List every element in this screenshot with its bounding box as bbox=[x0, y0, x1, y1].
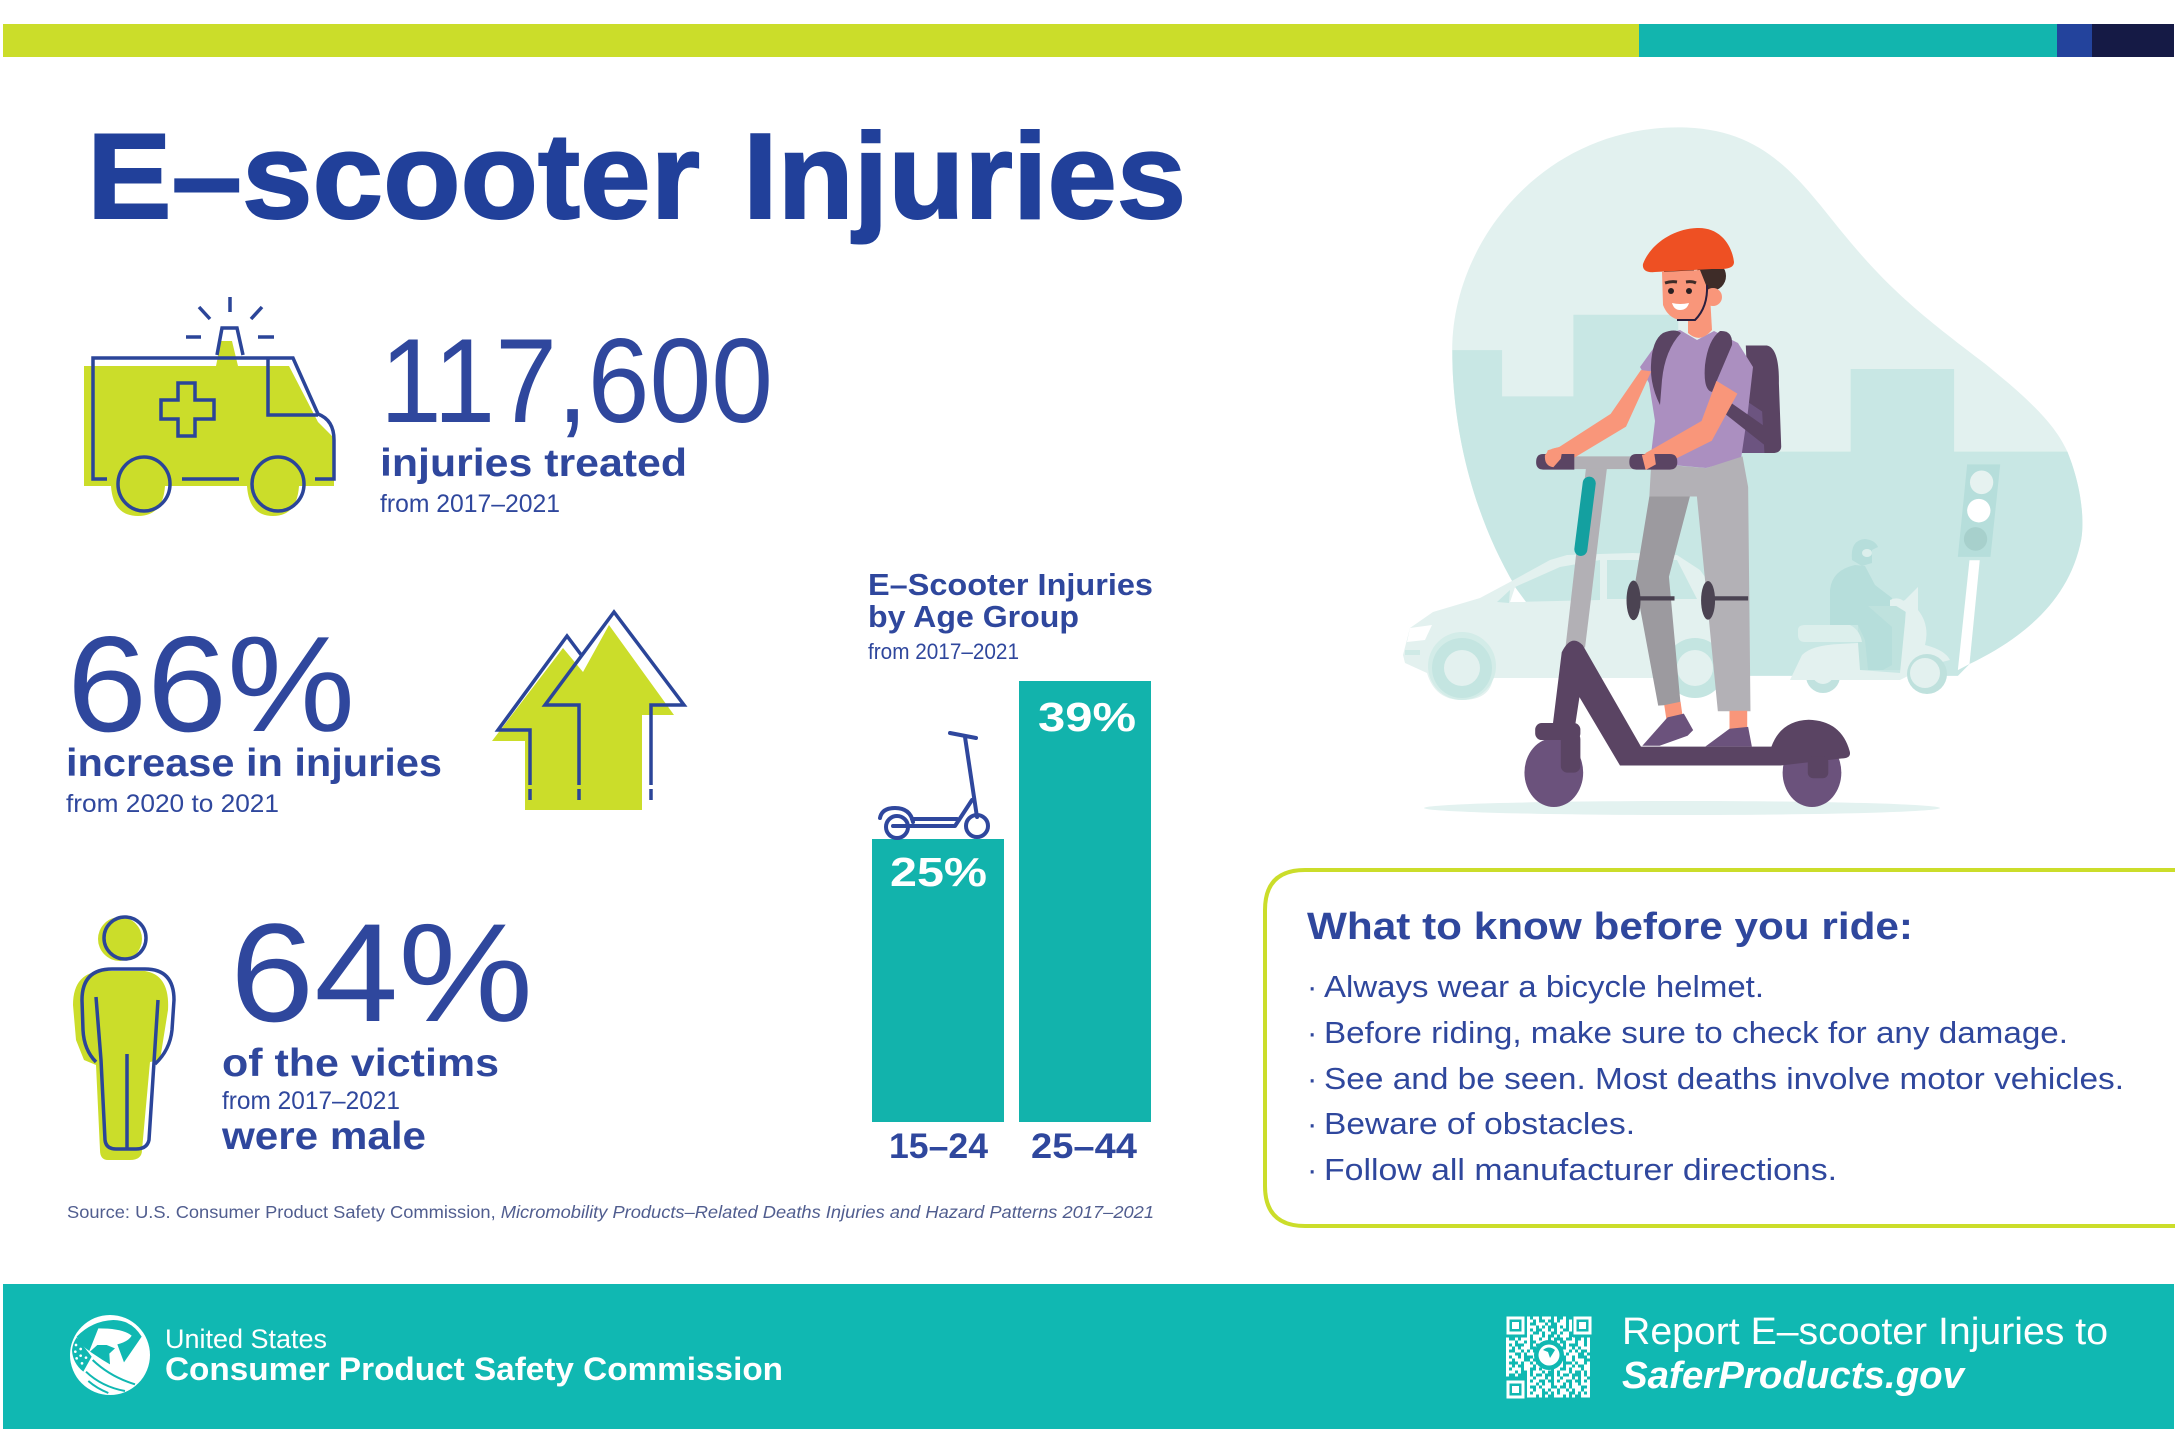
scooter handlebar and stem bbox=[1565, 456, 1643, 648]
tips list bbox=[1307, 969, 2124, 1187]
stat: male victims bbox=[73, 894, 533, 1160]
top colour bar bbox=[3, 24, 2174, 57]
tips list: Before riding, make sure to check for any damage. bbox=[1324, 1015, 2068, 1050]
tips list: · bbox=[1307, 1061, 1317, 1096]
rider shirt bbox=[1640, 330, 1753, 468]
handlebar grips bbox=[1536, 454, 1677, 470]
ankles and shoes bbox=[1642, 702, 1752, 747]
illustration: rider on e-scooter bbox=[1403, 127, 2088, 815]
backpack straps bbox=[1651, 330, 1767, 447]
chart heading: from 2017–2021 bbox=[868, 639, 1019, 664]
panel heading: What to know before you ride: bbox=[1307, 906, 1913, 948]
fingers bbox=[1545, 448, 1656, 470]
parked car bbox=[1403, 553, 1725, 700]
rider arms bbox=[1544, 370, 1737, 469]
big number: 117,600 bbox=[380, 314, 773, 448]
label: of the victims bbox=[222, 1042, 499, 1085]
tips list: · bbox=[1307, 1106, 1317, 1141]
footer band bbox=[3, 1284, 2174, 1429]
label: injuries treated bbox=[380, 442, 687, 485]
QR code bbox=[1505, 1315, 1592, 1399]
scooter frame bbox=[1535, 641, 1850, 778]
bar: 15–24 bbox=[872, 839, 1004, 1166]
tips list: · bbox=[1307, 1015, 1317, 1050]
rider trousers bbox=[1635, 456, 1750, 711]
tips list: Beware of obstacles. bbox=[1324, 1106, 1635, 1141]
agency name bbox=[165, 1324, 783, 1387]
panel: what to know before you ride bbox=[1265, 870, 2175, 1226]
report call to action bbox=[1622, 1311, 2108, 1397]
bar: 25–44: 39% bbox=[1038, 694, 1136, 740]
source note: Source: U.S. Consumer Product Safety Commission, Micromobility Products–Related Deaths Injuries and Hazard Patterns 2017–2021 bbox=[67, 1202, 1154, 1222]
date range: from 2017–2021 bbox=[380, 490, 560, 518]
date range: from 2017–2021 bbox=[222, 1087, 400, 1115]
title: Injuries bbox=[743, 108, 1186, 244]
knee pads bbox=[1627, 580, 1748, 620]
icon: small scooter bbox=[880, 733, 988, 838]
chart: injuries by age group bbox=[868, 567, 1153, 1166]
chart heading: E–Scooter Injuries bbox=[868, 567, 1153, 602]
title: E–scooter bbox=[87, 108, 700, 244]
icon: person bbox=[73, 917, 174, 1160]
tips list: Always wear a bicycle helmet. bbox=[1324, 969, 1764, 1004]
label: were male bbox=[221, 1115, 426, 1158]
background blob and skyline bbox=[1450, 127, 2088, 681]
bar: 15–24: 25% bbox=[890, 849, 987, 895]
bar: 25–44 bbox=[1019, 681, 1151, 1166]
icon: ambulance bbox=[84, 297, 334, 516]
tips list: Follow all manufacturer directions. bbox=[1324, 1152, 1837, 1187]
rider neck and head bbox=[1643, 228, 1734, 338]
tips list: · bbox=[1307, 969, 1317, 1004]
icon: CPSC logo bbox=[70, 1315, 150, 1395]
moped and rider bbox=[1790, 539, 1950, 694]
stat: increase in injuries bbox=[66, 608, 684, 818]
traffic light bbox=[1958, 464, 2000, 670]
report call to action: SaferProducts.gov bbox=[1622, 1355, 1966, 1397]
agency name: Consumer Product Safety Commission bbox=[165, 1351, 783, 1387]
title bbox=[87, 108, 1186, 244]
ground shadow bbox=[1424, 801, 1940, 815]
backpack bbox=[1739, 345, 1781, 453]
chart heading bbox=[868, 567, 1153, 664]
bar: 25–44: 25–44 bbox=[1031, 1127, 1138, 1166]
label: increase in injuries bbox=[66, 742, 442, 785]
icon: up arrows bbox=[492, 612, 684, 810]
big number: 66% bbox=[67, 608, 355, 760]
bar: 15–24: 15–24 bbox=[889, 1127, 989, 1166]
tips list: · bbox=[1307, 1152, 1317, 1187]
tips list: See and be seen. Most deaths involve motor vehicles. bbox=[1324, 1061, 2124, 1096]
report call to action: Report E–scooter Injuries to bbox=[1622, 1311, 2108, 1353]
stat: injuries treated bbox=[84, 297, 773, 518]
big number: 64% bbox=[230, 894, 533, 1051]
date range: from 2020 to 2021 bbox=[66, 790, 279, 818]
agency name: United States bbox=[165, 1324, 327, 1354]
chart heading: by Age Group bbox=[868, 599, 1079, 634]
scooter wheels bbox=[1524, 738, 1841, 807]
